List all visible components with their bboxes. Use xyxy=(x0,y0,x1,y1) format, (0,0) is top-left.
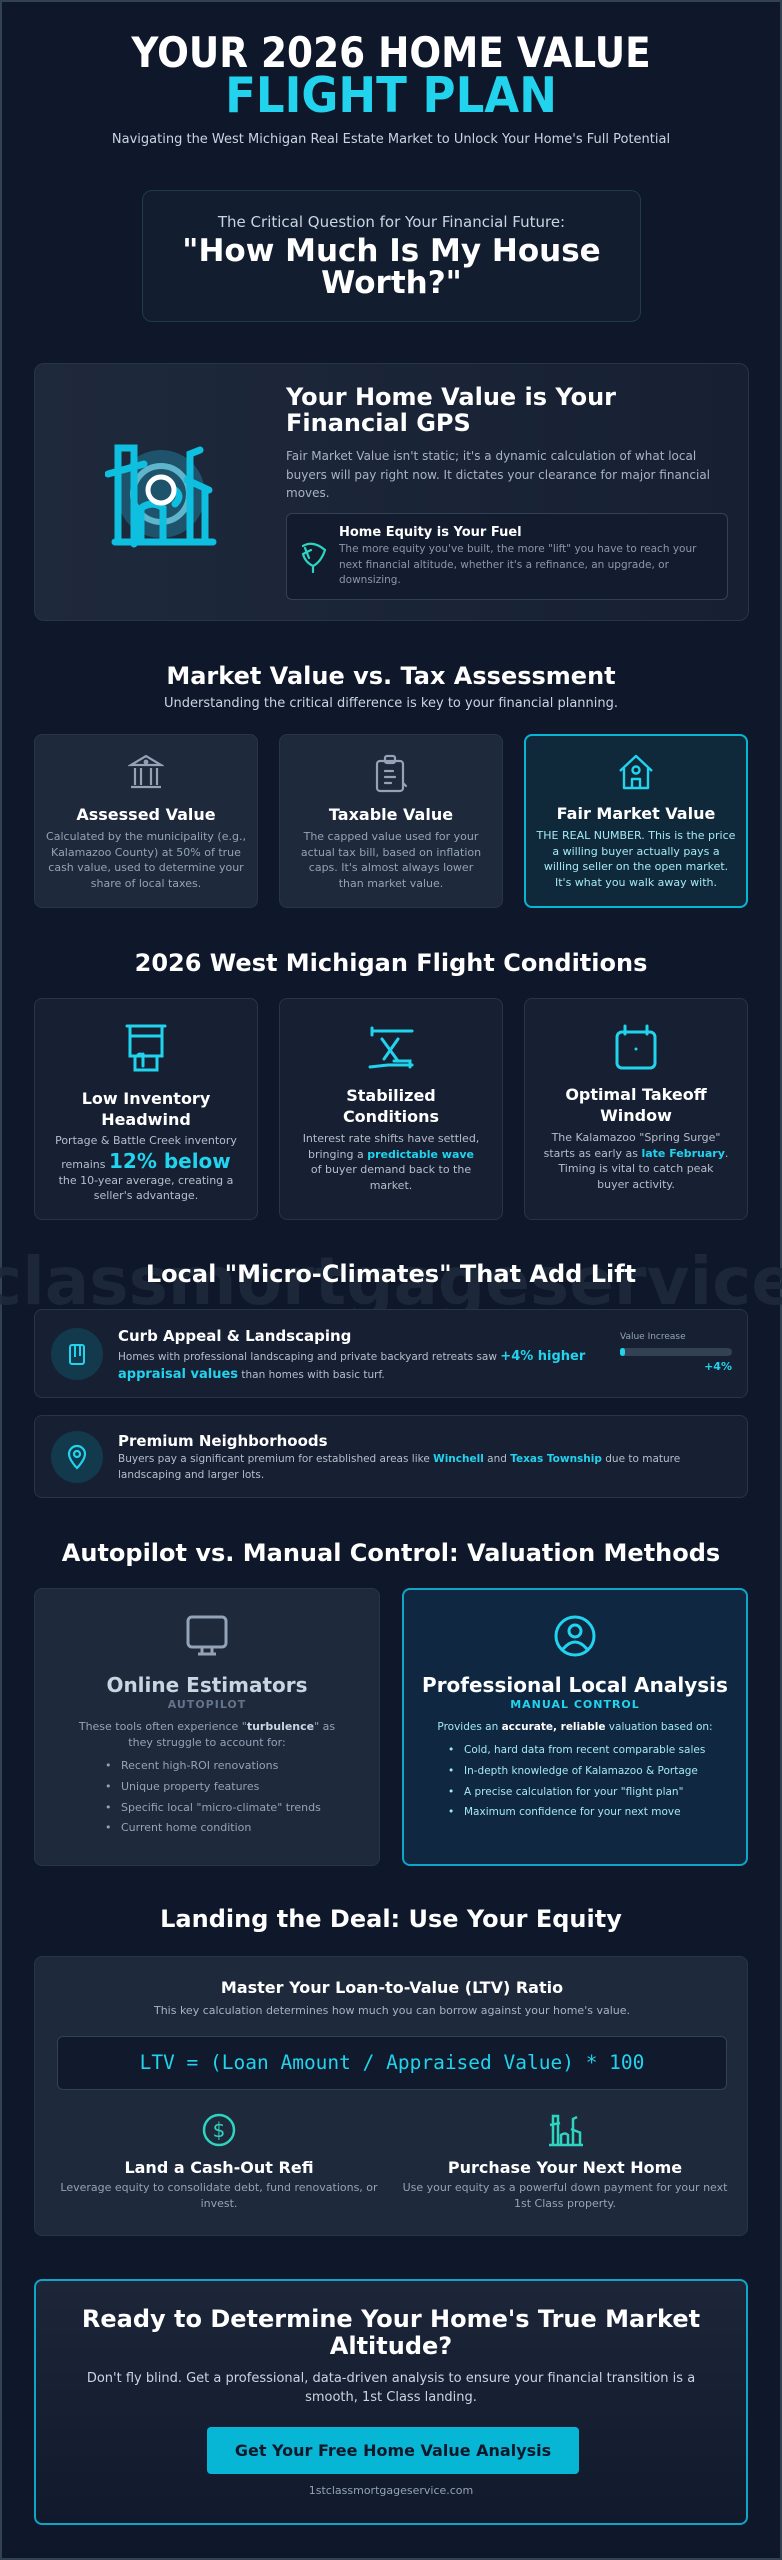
card: professional analysis: A precise calculation for your "flight plan" xyxy=(464,1786,683,1798)
card: online estimators: Specific local "micro-climate" trends xyxy=(121,1801,321,1814)
button: Get Your Free Home Value Analysis xyxy=(235,2441,551,2460)
card: taxable value: The capped value used for your actual tax bill, based on inflation caps. It's almost always lower than market value. xyxy=(301,830,481,890)
chart: value increase bar: Value Increase xyxy=(620,1332,686,1342)
card: takeoff window: Window xyxy=(600,1106,672,1125)
formula xyxy=(57,2036,727,2090)
callout: equity fuel xyxy=(286,513,728,600)
icon: user xyxy=(554,1616,596,1656)
panel: LTV: This key calculation determines how much you can borrow against your home's value. xyxy=(154,2004,630,2017)
column: cash-out refi: Leverage equity to consolidate debt, fund renovations, or invest. xyxy=(60,2181,378,2210)
card: professional analysis: Provides an accurate, reliable valuation based on: xyxy=(437,1721,713,1733)
card: assessed value: Assessed Value xyxy=(76,805,216,824)
chart: value increase bar: +4% xyxy=(704,1360,732,1373)
card: assessed value xyxy=(34,734,258,908)
card: low inventory: seller's advantage. xyxy=(94,1189,198,1202)
icon: bank xyxy=(128,754,164,788)
card: professional analysis: MANUAL CONTROL xyxy=(510,1698,640,1711)
chart: value increase bar xyxy=(620,1332,732,1373)
column: cash-out refi: Land a Cash-Out Refi xyxy=(124,2158,314,2177)
card: taxable value xyxy=(279,734,503,908)
card: fair market value xyxy=(524,734,748,908)
card: premium neighborhoods xyxy=(34,1415,748,1498)
card: professional analysis: In-depth knowledge of Kalamazoo & Portage xyxy=(464,1765,698,1777)
heading: Your Home Value is Your Financial GPS xyxy=(286,383,616,437)
card: online estimators: AUTOPILOT xyxy=(168,1698,246,1711)
icon: dollar xyxy=(202,2114,236,2146)
text: Understanding the critical difference is key to your financial planning. xyxy=(164,696,618,711)
callout: equity fuel: The more equity you've built, the more "lift" you have to reach your next financial altitude, whether it's a refinance, an upgrade, or downsizing. xyxy=(339,543,696,586)
card: fair market value: Fair Market Value xyxy=(557,804,715,823)
icon: buildings xyxy=(549,2114,583,2146)
card: low inventory: remains 12% below xyxy=(61,1149,231,1173)
panel: LTV: Master Your Loan-to-Value (LTV) Ratio xyxy=(221,1978,563,1997)
card: curb appeal xyxy=(34,1309,748,1398)
icon: dollar: $ xyxy=(213,2118,225,2142)
card: low inventory xyxy=(34,998,258,1220)
card: stabilized: Stabilized xyxy=(346,1086,436,1105)
icon: gps house xyxy=(105,444,216,548)
icon: monitor xyxy=(186,1616,228,1656)
card: low inventory: Portage & Battle Creek inventory xyxy=(55,1134,237,1147)
icon: location pin xyxy=(51,1431,103,1483)
panel: CTA: Don't fly blind. Get a professional, data-driven analysis to ensure your financial transition is a smooth, 1st Class landing. xyxy=(87,2371,695,2405)
question box: "How Much Is My House Worth?" xyxy=(182,233,601,301)
card: curb appeal: Homes with professional landscaping and private backyard retreats saw +4% higher appraisal values than homes with basic turf. xyxy=(118,1349,585,1382)
column: purchase next home xyxy=(403,2114,728,2210)
column: cash-out refi xyxy=(60,2114,378,2210)
card: stabilized xyxy=(279,998,503,1220)
column: purchase next home: Purchase Your Next Home xyxy=(448,2158,682,2177)
title: FLIGHT PLAN xyxy=(225,67,557,124)
question box: The Critical Question for Your Financial Future: xyxy=(218,213,565,231)
card: premium neighborhoods: Buyers pay a significant premium for established areas like Winchell and Texas Township due to mature landscaping and larger lots. xyxy=(118,1453,680,1480)
card: online estimators xyxy=(34,1588,380,1866)
heading: micro-climates: Local "Micro-Climates" That Add Lift xyxy=(146,1260,636,1288)
panel: CTA xyxy=(34,2279,748,2525)
panel: CTA: 1stclassmortgageservice.com xyxy=(309,2484,473,2497)
card: online estimators: Recent high-ROI renovations xyxy=(121,1759,278,1772)
card: professional analysis xyxy=(402,1588,748,1866)
card: stabilized: Interest rate shifts have settled, bringing a predictable wave of buyer demand back to the market. xyxy=(303,1132,479,1192)
callout: equity fuel: Home Equity is Your Fuel xyxy=(339,525,522,540)
card: online estimators: Unique property features xyxy=(121,1780,259,1793)
card: stabilized: Conditions xyxy=(343,1107,439,1126)
paragraph: Fair Market Value isn't static; it's a dynamic calculation of what local buyers will pay right now. It dictates your clearance for major financial moves. xyxy=(286,449,710,500)
card: fair market value: THE REAL NUMBER. This is the price a willing buyer actually pays a willing seller on the open market. It's what you walk away with. xyxy=(537,829,735,889)
card: professional analysis: Cold, hard data from recent comparable sales xyxy=(464,1744,705,1756)
card: curb appeal: Curb Appeal & Landscaping xyxy=(118,1327,351,1345)
column: purchase next home: Use your equity as a powerful down payment for your next 1st Class property. xyxy=(403,2181,727,2210)
subtitle: Navigating the West Michigan Real Estate Market to Unlock Your Home's Full Potential xyxy=(112,132,670,147)
card: low inventory: Low Inventory xyxy=(82,1089,210,1108)
card: low inventory: Headwind xyxy=(101,1110,191,1129)
button xyxy=(207,2427,579,2474)
card: low inventory: the 10-year average, creating a xyxy=(59,1174,233,1187)
title: YOUR 2026 HOME VALUE xyxy=(131,28,651,77)
heading: market vs tax: Market Value vs. Tax Assessment xyxy=(166,662,616,690)
panel: financial GPS xyxy=(34,363,749,621)
card: takeoff window xyxy=(524,998,748,1220)
icon: stabilized xyxy=(368,1026,414,1068)
heading: landing the deal: Landing the Deal: Use Your Equity xyxy=(160,1905,622,1933)
icon: landscape xyxy=(51,1328,103,1380)
card: takeoff window: The Kalamazoo "Spring Surge" starts as early as late February. Timing is vital to catch peak buyer activity. xyxy=(544,1131,728,1191)
card: taxable value: Taxable Value xyxy=(329,805,453,824)
title xyxy=(131,28,651,124)
icon: house xyxy=(619,754,653,790)
card: online estimators: Current home condition xyxy=(121,1821,251,1834)
card: assessed value: Calculated by the municipality (e.g., Kalamazoo County) at 50% of true cash value, used to determine your share of local taxes. xyxy=(46,830,246,890)
card: premium neighborhoods: Premium Neighborhoods xyxy=(118,1432,328,1450)
card: professional analysis: Professional Local Analysis xyxy=(422,1673,728,1697)
question box xyxy=(142,190,641,322)
card: takeoff window: Optimal Takeoff xyxy=(565,1085,707,1104)
icon: fuel xyxy=(302,542,326,574)
card: online estimators: These tools often experience "turbulence" as they struggle to account for: xyxy=(79,1720,335,1749)
heading: flight conditions: 2026 West Michigan Flight Conditions xyxy=(135,949,647,977)
heading: autopilot vs manual: Autopilot vs. Manual Control: Valuation Methods xyxy=(62,1539,720,1567)
card: online estimators: Online Estimators xyxy=(106,1673,308,1697)
panel: CTA: Ready to Determine Your Home's True Market Altitude? xyxy=(82,2305,700,2360)
formula: LTV = (Loan Amount / Appraised Value) * 100 xyxy=(140,2051,644,2074)
panel: LTV xyxy=(34,1956,748,2236)
icon: clipboard xyxy=(376,754,408,792)
card: professional analysis: Maximum confidence for your next move xyxy=(464,1806,681,1818)
icon: calendar xyxy=(616,1024,656,1070)
icon: inventory xyxy=(126,1024,166,1072)
